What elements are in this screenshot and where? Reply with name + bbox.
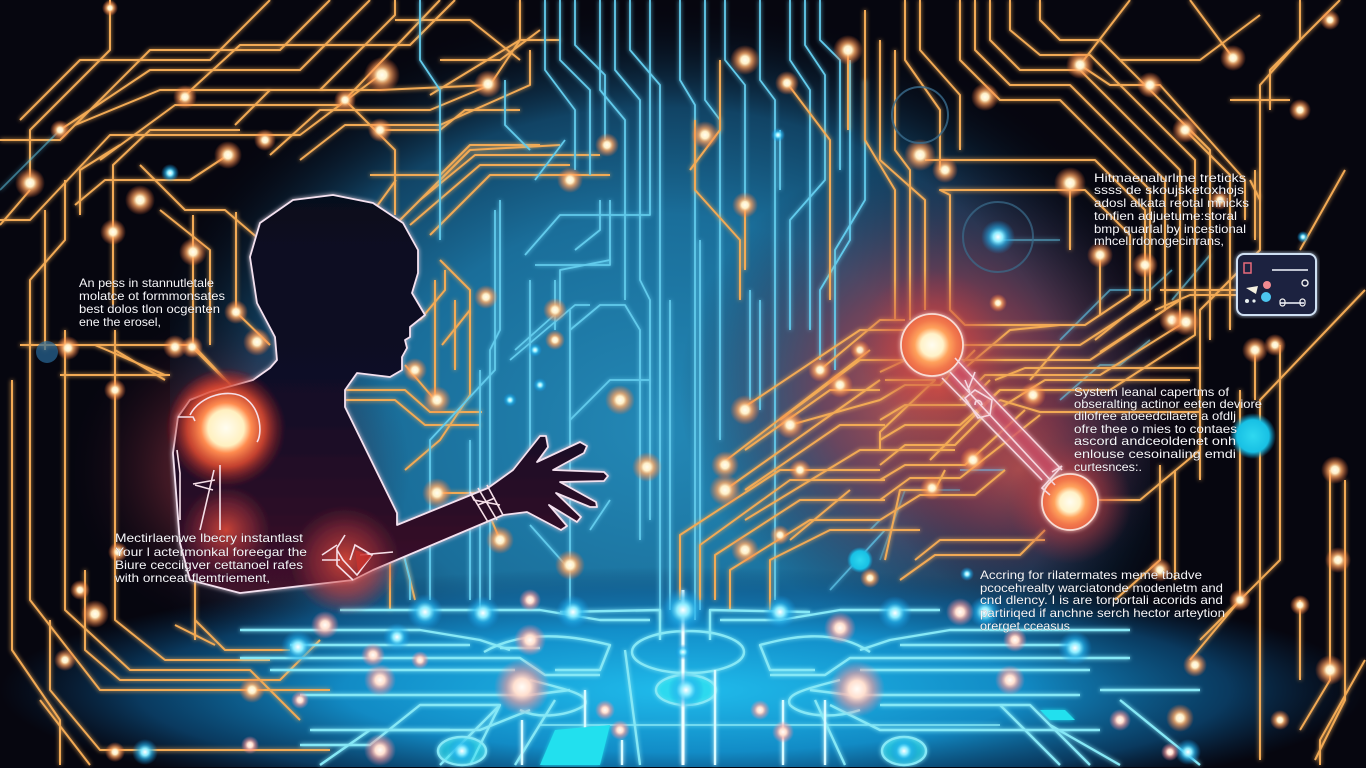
text block: upper right: tonfien adjuetume:storal <box>1094 209 1237 223</box>
text block: left: An pess in stannutletale <box>79 276 214 290</box>
text block: lower right: cnd dlency. I is are torportali acorids and <box>980 593 1223 607</box>
text block: lower right: pcocehrealty warciatonde modenletm and <box>980 581 1223 595</box>
text block: middle right: System leanal capertms of <box>1074 385 1230 399</box>
text block: upper right: ssss de skoujsketoxhojs <box>1094 183 1244 197</box>
text block: lower right: orerget cceasus <box>980 619 1070 633</box>
human figure silhouette with robotic arm <box>166 195 608 615</box>
text block: middle right <box>1074 385 1262 474</box>
text block: upper right: bmp quarlal by incestional <box>1094 222 1246 236</box>
text block: left <box>79 276 225 329</box>
text block: middle right: enlouse cesoinaling emdi <box>1074 447 1236 461</box>
text block: lower left: Your l actermonkal foreegar the <box>115 545 307 559</box>
orange circuit traces, left side <box>0 0 610 765</box>
text block: left: best dolos tlon ocgenten <box>79 302 220 316</box>
text block: lower right: Accring for rilatermates meme tbadve <box>980 568 1202 582</box>
text block: lower left <box>114 531 307 585</box>
text block: upper right: adosl alkata reotal mnicks <box>1094 196 1249 210</box>
text block: lower left: Mectirlaenwe lbecry instantlast <box>115 531 304 545</box>
glowing nodes, pink floor <box>241 589 1179 766</box>
text block: left: molatce ot formmonsates <box>79 289 225 303</box>
glowing nodes, cyan <box>36 128 1309 765</box>
text block: lower left: Biure cecciigver cettanoel rafes <box>115 558 303 572</box>
blue circuit traces, centre <box>0 0 1210 620</box>
robotic link between two joints <box>857 270 1132 564</box>
circuit floor <box>240 590 1200 765</box>
orange circuit traces, right side <box>680 0 1365 765</box>
text block: upper right <box>1094 171 1249 248</box>
text block: lower left: with ornceat flemtriement, <box>114 571 270 585</box>
text block: lower right <box>980 568 1225 633</box>
text block: middle right: ofre thee o mies to contaes <box>1074 422 1237 436</box>
icon card <box>1237 254 1316 315</box>
text block: upper right: Hitmaenalurlme treticks <box>1094 171 1246 185</box>
text block: lower right: partiriqed if anchne serch hector arteytion <box>980 606 1225 620</box>
text block: left: ene the erosel, <box>79 315 161 329</box>
text block: middle right: ascord andceoldenet onh <box>1074 434 1236 448</box>
text block: upper right: mhcel.rdonogecinrans, <box>1094 234 1224 248</box>
text block: middle right: obseralting actinor eeten deviore <box>1074 397 1262 411</box>
text block: middle right: curtesnces:. <box>1074 460 1142 474</box>
text block: middle right: dilofree aloeedcilaete a ofdlj <box>1074 409 1236 423</box>
large circuit rings top right <box>892 87 1033 272</box>
